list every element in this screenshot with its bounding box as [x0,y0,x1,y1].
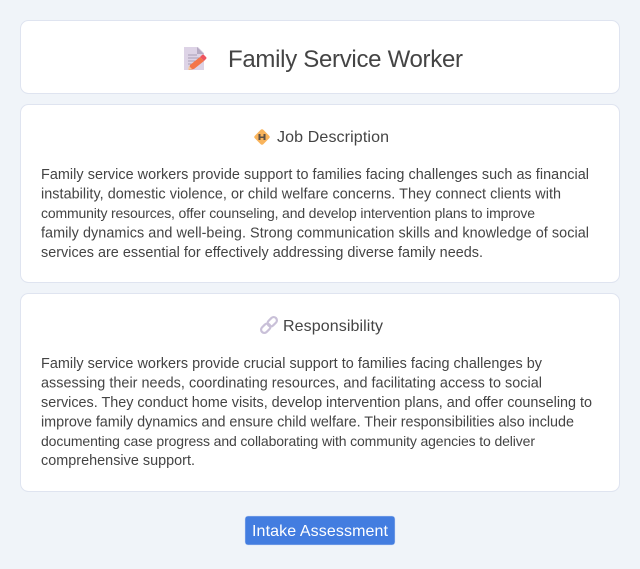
text block: responsibility: comprehensive support. [41,453,195,469]
heading: job description: Job Description [277,129,389,146]
text block: responsibility: services. They conduct home visits, develop intervention plans, and offer counseling to [41,395,592,411]
text block: job description: instability, domestic violence, or child welfare concerns. They connect clients with [41,186,561,202]
text block: responsibility: improve family dynamics and ensure child welfare. Their responsibilities also include [41,414,574,430]
text block: job description [41,167,589,261]
title: Family Service Worker [228,46,463,73]
icon: chain link [260,316,278,334]
text block: responsibility: Family service workers provide crucial support to families facing challenges by [41,356,543,372]
text block: job description: family dynamics and well-being. Strong communication skills and knowledge of social [41,226,589,242]
icon: document with pencil [184,47,206,70]
panel: responsibility [20,294,620,492]
text block: responsibility: assessing their needs, coordinating resources, and facilitating access to social [41,376,542,392]
text block: job description: Family service workers provide support to families facing challenges such as financial [41,167,589,183]
button: intake assessment [245,516,395,545]
heading: responsibility: Responsibility [283,318,383,335]
panel: title card [20,20,620,94]
text block: job description: services are essential for effectively addressing diverse family needs. [41,245,483,261]
panel: job description [20,104,620,282]
text block: job description: community resources, offer counseling, and develop intervention plans to improve [41,205,535,221]
text block: responsibility: documenting case progress and collaborating with community agencies to deliver [41,433,535,449]
icon: warning diamond [254,129,270,145]
button: intake assessment: Intake Assessment [252,523,389,540]
text block: responsibility [41,356,592,469]
